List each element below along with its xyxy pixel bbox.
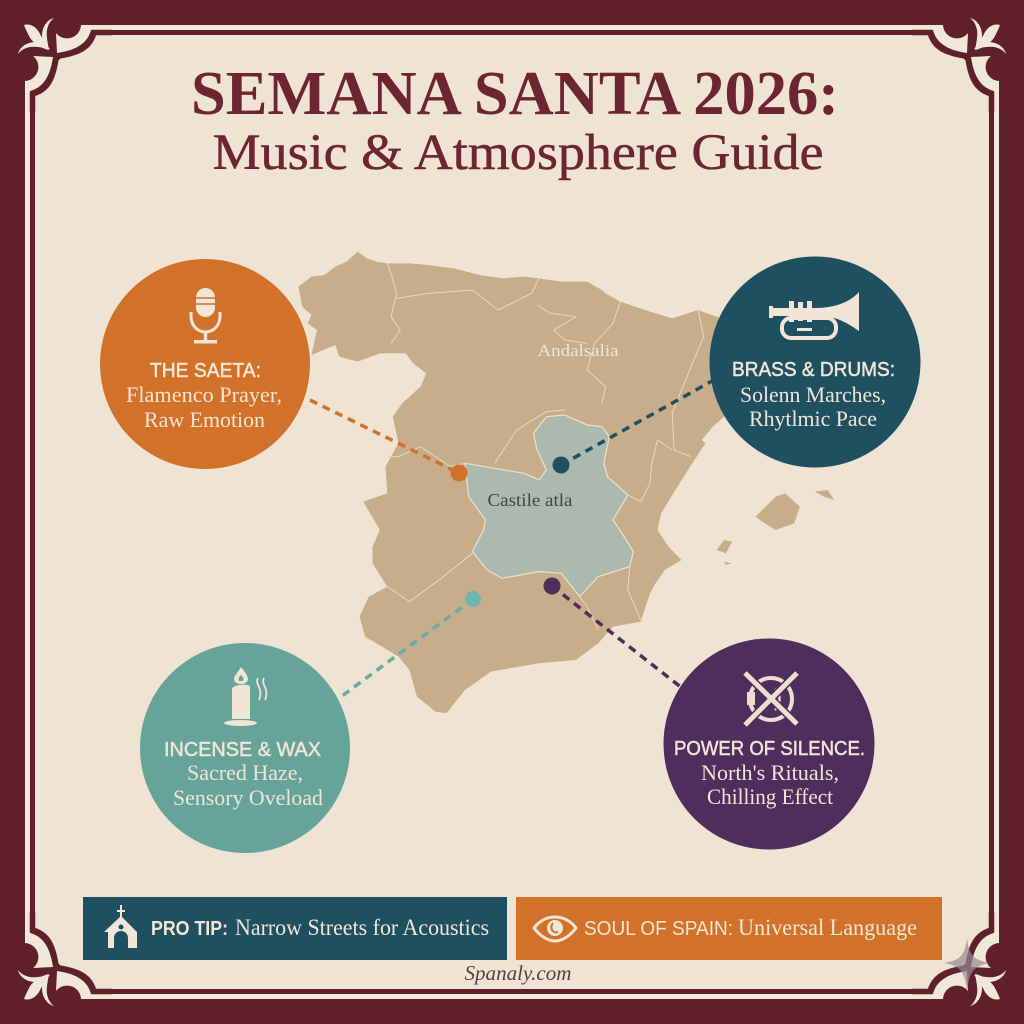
icon: trumpet bbox=[769, 292, 859, 338]
map label: Castile: Castile atla bbox=[488, 490, 572, 510]
panel: the saeta bbox=[100, 259, 310, 469]
panel: power of silence bbox=[664, 638, 874, 850]
connector: silence bbox=[544, 578, 682, 688]
description: Chilling Effect bbox=[707, 784, 833, 809]
icon: crossed-out speaker bbox=[745, 673, 797, 725]
description: Sacred Haze, bbox=[187, 760, 303, 785]
tip text: PRO TIP: bbox=[151, 918, 228, 940]
description: Rhytlmic Pace bbox=[749, 406, 877, 431]
description: Flamenco Prayer, bbox=[126, 382, 282, 407]
mainland silhouette bbox=[298, 252, 761, 713]
connector: brass bbox=[552, 381, 712, 474]
heading: BRASS & DRUMS: bbox=[732, 359, 895, 381]
panel: soul of spain bar bbox=[516, 897, 942, 960]
panel: brass and drums bbox=[710, 256, 920, 468]
heading: INCENSE & WAX bbox=[164, 739, 321, 761]
soul text: Universal Language bbox=[738, 915, 917, 940]
description: North's Rituals, bbox=[701, 760, 839, 785]
connector: saeta bbox=[310, 400, 468, 482]
subtitle: Music & Atmosphere Guide bbox=[212, 125, 824, 181]
panel: pro tip bar bbox=[83, 897, 507, 960]
panel: incense and wax bbox=[140, 643, 350, 853]
heading: POWER OF SILENCE. bbox=[674, 738, 865, 760]
Balearic islands bbox=[717, 490, 834, 565]
map of Spain bbox=[298, 252, 834, 713]
icon: eye bbox=[534, 917, 576, 941]
source credit: Spanaly.com bbox=[464, 961, 572, 985]
Castilla-La Mancha highlighted region bbox=[465, 415, 633, 597]
title: SEMANA SANTA 2026: bbox=[191, 60, 839, 128]
icon: candle bbox=[224, 667, 266, 726]
tip text: Narrow Streets for Acoustics bbox=[235, 915, 489, 940]
icon: microphone bbox=[191, 288, 220, 344]
description bbox=[740, 382, 886, 431]
description bbox=[173, 760, 323, 810]
connector: incense bbox=[338, 591, 481, 699]
description: Sensory Oveload bbox=[173, 785, 323, 810]
soul text: SOUL OF SPAIN: bbox=[584, 918, 733, 940]
regional borders bbox=[387, 263, 704, 630]
description: Raw Emotion bbox=[144, 407, 265, 432]
description: Solenn Marches, bbox=[740, 382, 886, 407]
heading: THE SAETA: bbox=[150, 360, 261, 382]
icon: church bbox=[104, 905, 137, 948]
description bbox=[126, 382, 282, 432]
map label: Andalsalia: Andalsalia bbox=[538, 341, 619, 360]
description bbox=[701, 760, 839, 809]
